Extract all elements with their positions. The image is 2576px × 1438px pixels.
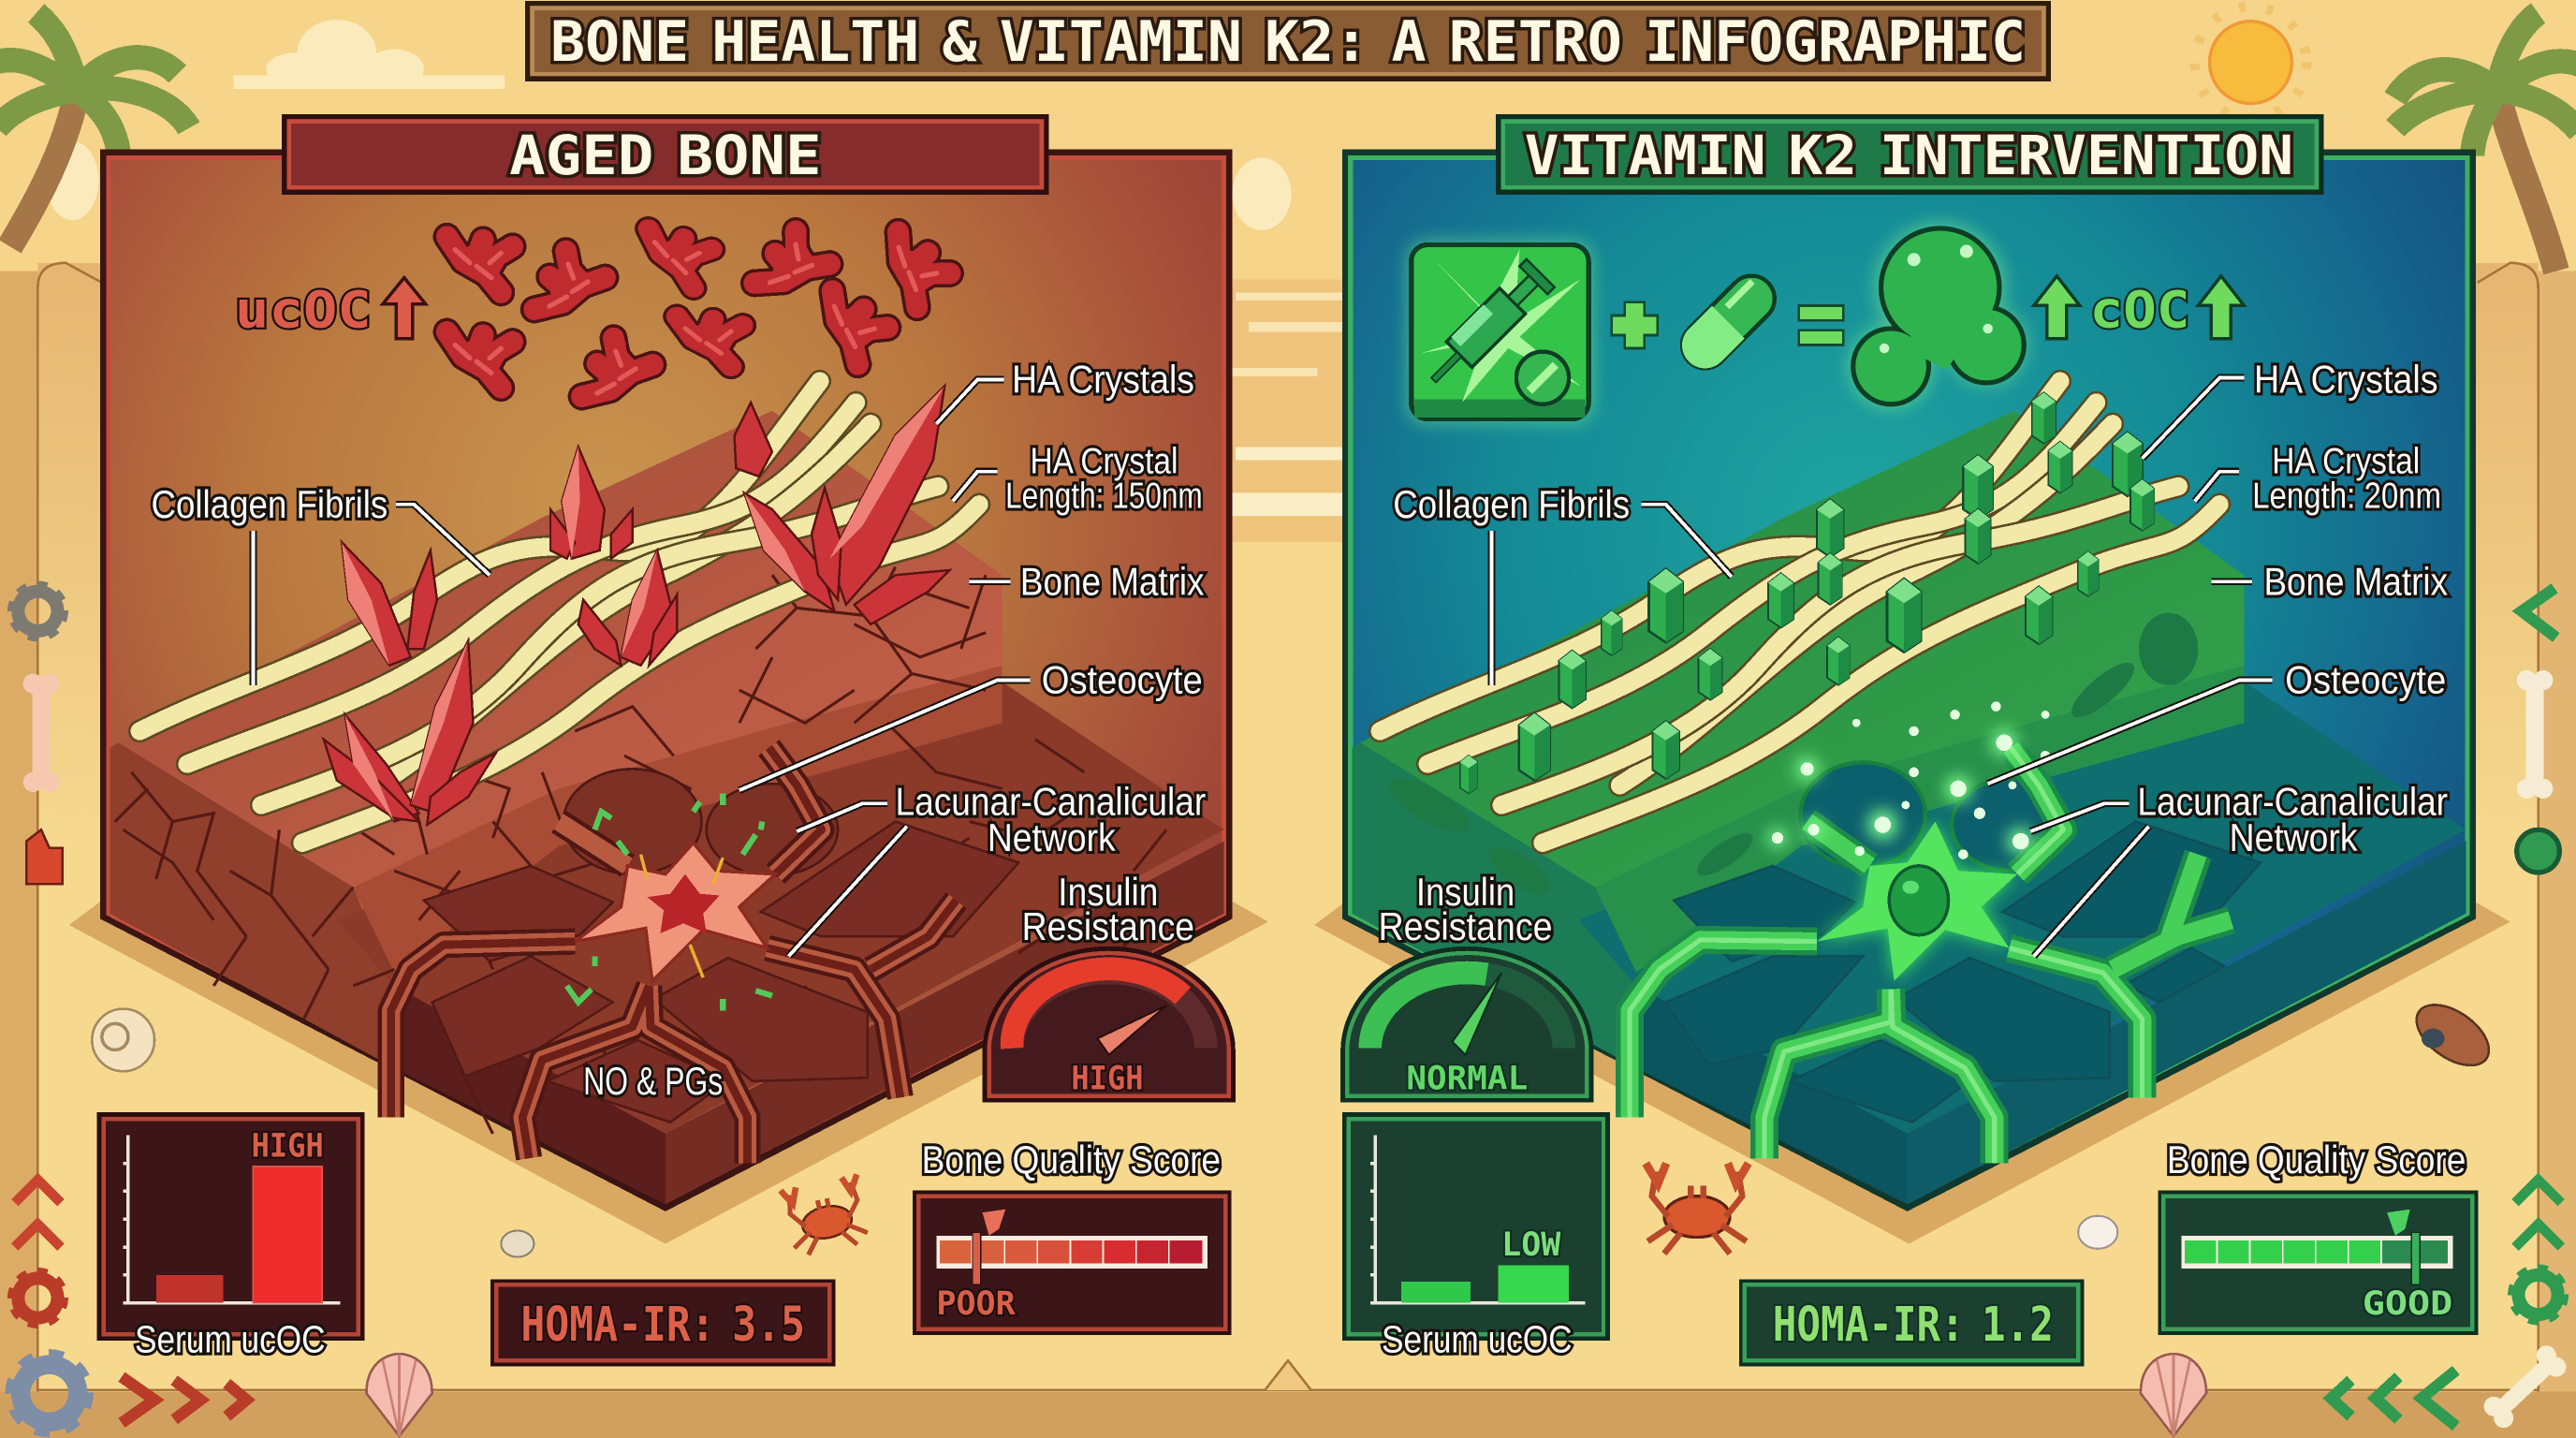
- panel frame: vitamin K2: [1345, 153, 2472, 1208]
- labels: vitamin K2: Network: [2230, 815, 2358, 859]
- icon: syringe and tablet tile: [1406, 240, 1593, 424]
- icon: carboxylated osteocalcin molecule: [1848, 222, 2027, 409]
- panel shadows on sand: [69, 901, 2510, 1244]
- icon: bottom right scallop shell: [2141, 1354, 2206, 1436]
- labels: aged bone: Insulin: [1058, 870, 1158, 914]
- background: clouds: [46, 20, 1292, 230]
- icon: left rail red gear: [11, 1271, 65, 1325]
- leader lines: aged bone: [253, 379, 1030, 956]
- labels: aged bone: Collagen Fibrils: [152, 482, 388, 526]
- lacunae: aged bone: [564, 769, 838, 875]
- icon: right pebble: [2078, 1216, 2117, 1249]
- score bar: bone quality poor: [915, 1137, 1229, 1332]
- ucOC label and arrow: ucOC: [235, 280, 372, 339]
- bar chart: serum ucOC low: [1345, 1116, 1606, 1360]
- labels: aged bone: Resistance: [1022, 904, 1194, 948]
- osteocyte cell: aged bone: [575, 843, 775, 981]
- bar chart: serum ucOC high: HIGH: [252, 1127, 324, 1166]
- icon: left rail thumb marker: [26, 829, 63, 884]
- nitric oxide and prostaglandin specks: [567, 794, 772, 1010]
- icon: right-pointing chevrons: [122, 1377, 246, 1423]
- icon: left rail bone: [23, 674, 59, 792]
- score bar: bone quality good: GOOD: [2363, 1284, 2452, 1323]
- cOC label and arrows: [2034, 276, 2244, 339]
- stat box: HOMA-IR 1.2: [1741, 1282, 2082, 1364]
- labels: vitamin K2: Collagen Fibrils: [1393, 482, 1630, 526]
- gauge: insulin resistance high: [986, 949, 1232, 1099]
- leader lines: vitamin K2: [1492, 378, 2272, 956]
- title banner: BONE HEALTH & VITAMIN K2: A RETRO INFOGRAPHIC: [550, 10, 2026, 75]
- panel heading: aged bone: [285, 117, 1046, 192]
- icon: sun: [2195, 7, 2306, 118]
- icon: right palm tree: [2395, 13, 2576, 271]
- collagen fibrils: aged bone: [139, 381, 979, 843]
- labels: aged bone: HA Crystal: [1030, 441, 1178, 481]
- labels: aged bone: HA Crystals: [1012, 357, 1194, 401]
- lacunar-canalicular network: vitamin K2: [1630, 748, 2231, 1164]
- lacunar-canalicular network: aged bone: [391, 748, 956, 1164]
- background: sea band: [1232, 279, 1347, 542]
- icon: left crab: [781, 1174, 871, 1258]
- icon: spiral shell: [92, 1009, 154, 1071]
- icon: corner bone: [2484, 1345, 2566, 1428]
- icon: capsule: [1673, 266, 1784, 378]
- bar chart: serum ucOC low: Serum ucOC: [1382, 1317, 1573, 1360]
- labels: vitamin K2: Length: 20nm: [2252, 476, 2441, 516]
- icon: left rail gear: [11, 585, 65, 638]
- icon: left-pointing green chevrons: [2331, 1371, 2456, 1426]
- stat box: HOMA-IR 1.2: HOMA-IR: 1.2: [1773, 1298, 2054, 1353]
- score bar: bone quality poor: Bone Quality Score: [922, 1137, 1221, 1181]
- icon: right rail bone: [2517, 670, 2553, 799]
- labels: vitamin K2: HA Crystals: [2254, 357, 2438, 401]
- ucOC label and arrow: [235, 278, 426, 339]
- bar chart: serum ucOC low: LOW: [1501, 1225, 1561, 1264]
- lacunae: vitamin K2: [1801, 762, 2070, 871]
- HA crystals: large needle clusters: [324, 386, 949, 825]
- labels: vitamin K2: [1379, 357, 2448, 948]
- labels: aged bone: NO & PGs: [583, 1059, 723, 1103]
- labels: vitamin K2: Bone Matrix: [2263, 559, 2448, 603]
- labels: aged bone: Network: [988, 815, 1117, 859]
- gauge: insulin resistance high: HIGH: [1071, 1060, 1144, 1098]
- icon: left rail up chevrons: [15, 1180, 61, 1247]
- icon: left pebble: [501, 1231, 534, 1257]
- isometric block: vitamin K2: [1352, 411, 2466, 1204]
- icon: brown shell: [2406, 992, 2499, 1078]
- icon: right rail green gear: [2511, 1269, 2565, 1321]
- labels: aged bone: [152, 357, 1206, 1103]
- collagen fibrils: vitamin K2: [1380, 381, 2219, 843]
- osteocyte cell: vitamin K2: [1817, 822, 2017, 981]
- score bar: bone quality good: [2160, 1137, 2476, 1332]
- labels: vitamin K2: Resistance: [1379, 904, 1553, 948]
- gauge: insulin resistance normal: [1344, 949, 1590, 1099]
- icon: corner blue gear: [11, 1356, 87, 1431]
- labels: aged bone: Bone Matrix: [1020, 559, 1204, 603]
- stat box: HOMA-IR 3.5: [493, 1282, 833, 1364]
- stat box: HOMA-IR 3.5: HOMA-IR: 3.5: [520, 1298, 805, 1353]
- labels: vitamin K2: HA Crystal: [2272, 441, 2420, 481]
- bar chart: serum ucOC high: [100, 1116, 361, 1360]
- gauge: insulin resistance normal: NORMAL: [1406, 1060, 1528, 1098]
- HA crystals: small ordered prisms: [1460, 392, 2154, 794]
- icon: right rail green coin: [2517, 829, 2559, 873]
- labels: vitamin K2: Insulin: [1416, 870, 1515, 914]
- icon: right crab: [1646, 1164, 1749, 1254]
- equals sign: [1799, 305, 1843, 345]
- icon: left palm tree: [0, 13, 189, 246]
- panel heading: aged bone: AGED BONE: [509, 124, 822, 187]
- uncarboxylated osteocalcin molecules: [446, 227, 955, 416]
- panel: aged bone: [100, 117, 1232, 1364]
- icon: right rail green fragment: [2522, 588, 2556, 638]
- labels: aged bone: Lacunar-Canalicular: [896, 779, 1206, 823]
- panel heading: vitamin K2 intervention: VITAMIN K2 INTERVENTION: [1525, 124, 2293, 187]
- labels: vitamin K2: Osteocyte: [2285, 658, 2446, 702]
- panel: vitamin K2 intervention: [1344, 117, 2476, 1364]
- score bar: bone quality poor: POOR: [936, 1284, 1017, 1323]
- floor cells: vitamin K2: [1666, 822, 2261, 1123]
- labels: aged bone: Length: 150nm: [1005, 476, 1203, 516]
- labels: vitamin K2: Lacunar-Canalicular: [2137, 779, 2448, 823]
- bar chart: serum ucOC high: Serum ucOC: [135, 1317, 326, 1360]
- isometric block: aged bone: [110, 411, 1224, 1204]
- glowing mineralisation dots: [1767, 701, 2050, 859]
- floor cells: aged bone: [424, 822, 1018, 1123]
- labels: aged bone: Osteocyte: [1042, 658, 1203, 702]
- plus sign: [1612, 302, 1658, 348]
- icon: right rail up chevrons: [2515, 1180, 2561, 1247]
- cOC label and arrows: cOC: [2089, 280, 2190, 339]
- panel frame: aged bone: [104, 153, 1229, 1208]
- score bar: bone quality good: Bone Quality Score: [2167, 1137, 2466, 1181]
- icon: bottom left scallop shell: [366, 1354, 432, 1436]
